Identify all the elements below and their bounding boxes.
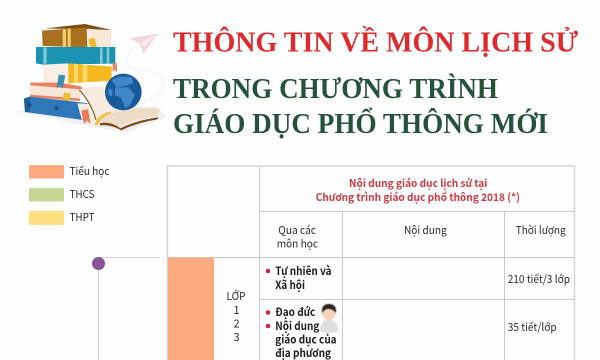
grade label: 2 — [233, 316, 240, 332]
title: green lines: TRONG CHƯƠNG TRÌNH — [173, 72, 498, 105]
grade label — [226, 288, 246, 345]
grade label: LỚP — [226, 288, 246, 304]
row 1 subjects: Tự nhiên và — [275, 263, 332, 279]
level bar: Tiểu học — [168, 258, 214, 360]
column heading: content: Nội dung — [404, 222, 447, 238]
grade label: 3 — [233, 329, 240, 345]
icon: person — [320, 304, 338, 333]
table heading — [316, 176, 520, 205]
legend — [29, 163, 110, 225]
icon: stack of books with globe and paper plane — [17, 24, 167, 133]
row 1 duration: 210 tiết/3 lớp — [508, 271, 570, 287]
title: green lines: GIÁO DỤC PHỔ THÔNG MỚI — [173, 106, 548, 140]
grade label: 1 — [233, 302, 240, 318]
table — [168, 166, 575, 360]
row 2 subjects — [266, 304, 337, 360]
title: red line: THÔNG TIN VỀ MÔN LỊCH SỬ — [173, 24, 578, 58]
column heading: subjects — [277, 222, 318, 252]
column heading: duration: Thời lượng — [516, 222, 566, 238]
timeline marker — [92, 257, 159, 360]
row 2 subjects: Đạo đức — [275, 304, 315, 320]
row 2 subjects: giáo dục của — [275, 332, 337, 348]
table heading: Chương trình giáo dục phổ thông 2018 (*) — [316, 190, 520, 205]
column heading: subjects: môn học — [277, 236, 318, 252]
title: green lines — [173, 72, 548, 140]
column heading: subjects: Qua các — [278, 222, 316, 238]
row 1 subjects: Xã hội — [275, 277, 305, 293]
legend item: THCS: THCS — [70, 186, 95, 202]
row 1 subjects — [266, 263, 332, 293]
legend item: THPT: THPT — [70, 209, 95, 225]
table heading: Nội dung giáo dục lịch sử tại — [349, 176, 487, 191]
row 2 subjects: Nội dung — [275, 318, 320, 334]
legend item: Tiểu học: Tiểu học — [70, 163, 110, 179]
row 2 duration: 35 tiết/lớp — [508, 319, 557, 335]
table grid — [168, 166, 575, 360]
